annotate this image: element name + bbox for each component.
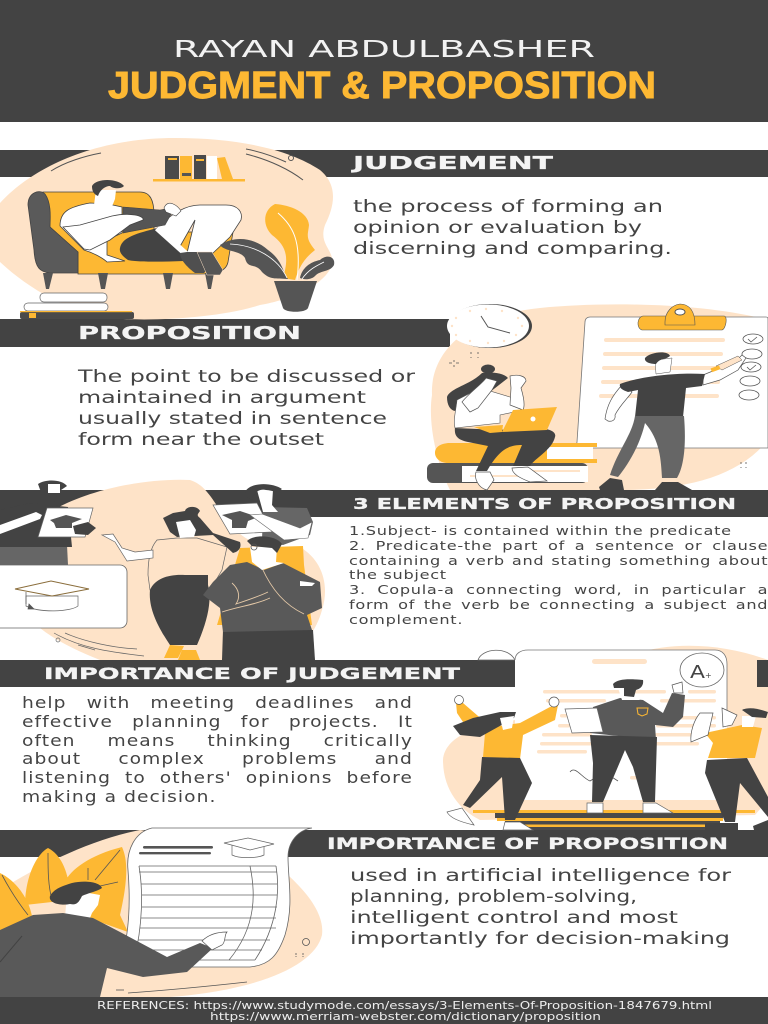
text: importance of proposition: used in artificial intelligence for: [350, 866, 731, 885]
text: importance of judgement: effective planning for projects. It: [22, 712, 413, 731]
yellow leaves: [0, 847, 128, 932]
stage stripes: [473, 810, 755, 830]
references footer: REFERENCES: https://www.studymode.com/essays/3-Elements-Of-Proposition-1847679.html: [97, 1000, 712, 1012]
heading: importance of proposition: IMPORTANCE OF PROPOSITION: [327, 834, 728, 853]
text: judgement definition: discerning and comparing.: [353, 239, 672, 258]
illustration: man pointing at document: [0, 828, 322, 997]
section bar: importance of judgement: [0, 660, 768, 687]
man behind with tablet: [213, 484, 313, 545]
yellow jacket behind thinker: [217, 546, 312, 625]
text: 3 elements list: containing a verb and stating something about: [349, 553, 768, 568]
clipboard checklist: [577, 304, 768, 448]
woman in centre: [102, 507, 241, 660]
left man with tablet: [0, 480, 96, 565]
armchair: [28, 192, 233, 289]
text: 3 elements list: form of the verb be connecting a subject and: [349, 597, 768, 612]
cheering woman: [447, 696, 559, 830]
graduation cap card: [0, 565, 127, 628]
text: importance of proposition: planning, problem-solving,: [350, 887, 637, 906]
man pointing: [0, 882, 227, 997]
grade bubble: [680, 653, 724, 687]
header banner: [0, 0, 768, 122]
thinking man with glasses: [203, 536, 322, 660]
text: importance of proposition: intelligent control and most: [350, 908, 679, 927]
cheering student: [691, 708, 768, 830]
teacher: [565, 679, 685, 813]
section bar: proposition: [0, 319, 450, 347]
text: proposition definition: maintained in argument: [78, 388, 367, 407]
illustration: man reading in armchair: [0, 138, 334, 319]
text: importance of judgement: about complex problems and: [22, 749, 413, 768]
text: proposition definition: usually stated in sentence: [78, 409, 387, 428]
section bar: judgement: [0, 150, 768, 177]
text: proposition definition: form near the outset: [78, 430, 325, 449]
illustration: group of students discussing: [0, 480, 325, 660]
potted plant: [220, 204, 334, 312]
title: JUDGMENT & PROPOSITION: [108, 65, 656, 107]
text: 3 elements list: 1.Subject- is contained within the predicate: [349, 523, 732, 538]
text: importance of proposition: [350, 866, 731, 948]
text: importance of judgement: help with meeting deadlines and: [22, 693, 413, 712]
text: judgement definition: the process of forming an: [353, 197, 663, 216]
text: importance of judgement: making a decision.: [22, 787, 216, 806]
text: judgement definition: [353, 197, 672, 258]
text: importance of judgement: [22, 693, 413, 806]
text: judgement definition: opinion or evaluation by: [353, 218, 642, 237]
text: proposition definition: [77, 367, 415, 449]
reader: [60, 180, 241, 275]
grade bubble: +: [705, 671, 712, 680]
grade bubble: A: [690, 662, 706, 683]
heading: 3 elements: 3 ELEMENTS OF PROPOSITION: [353, 495, 736, 513]
book stack: [20, 293, 134, 319]
text: 3 elements list: the subject: [349, 567, 447, 582]
references footer: https://www.merriam-webster.com/dictionary/proposition: [210, 1011, 601, 1023]
document scroll: [105, 828, 312, 967]
man ticking list: [599, 352, 746, 490]
text: 3 elements list: 3. Copula-a connecting word, in particular a: [349, 582, 768, 597]
text: importance of judgement: listening to others' opinions before: [22, 768, 413, 787]
stressed woman with laptop: [427, 364, 597, 490]
text: importance of judgement: often means thinking critically: [22, 731, 413, 750]
author name: RAYAN ABDULBASHER: [173, 37, 595, 63]
heading: judgement: JUDGEMENT: [350, 153, 554, 174]
text: 3 elements list: [349, 523, 768, 627]
text: proposition definition: The point to be discussed or: [77, 367, 415, 386]
text: 3 elements list: 2. Predicate-the part of a sentence or clause: [349, 538, 768, 553]
clock: [447, 304, 532, 348]
heading: proposition: PROPOSITION: [78, 323, 301, 344]
text: 3 elements list: complement.: [349, 612, 463, 627]
section bar: 3 elements: [0, 490, 768, 517]
section bar: importance of proposition: [0, 830, 768, 857]
text: importance of proposition: importantly for decision-making: [350, 929, 730, 948]
references footer: [0, 997, 768, 1024]
illustration: teacher and cheering students: [443, 646, 768, 830]
illustration: woman stressed on books, man at checklist: [427, 304, 768, 490]
heading: importance of judgement: IMPORTANCE OF JUDGEMENT: [44, 664, 460, 683]
